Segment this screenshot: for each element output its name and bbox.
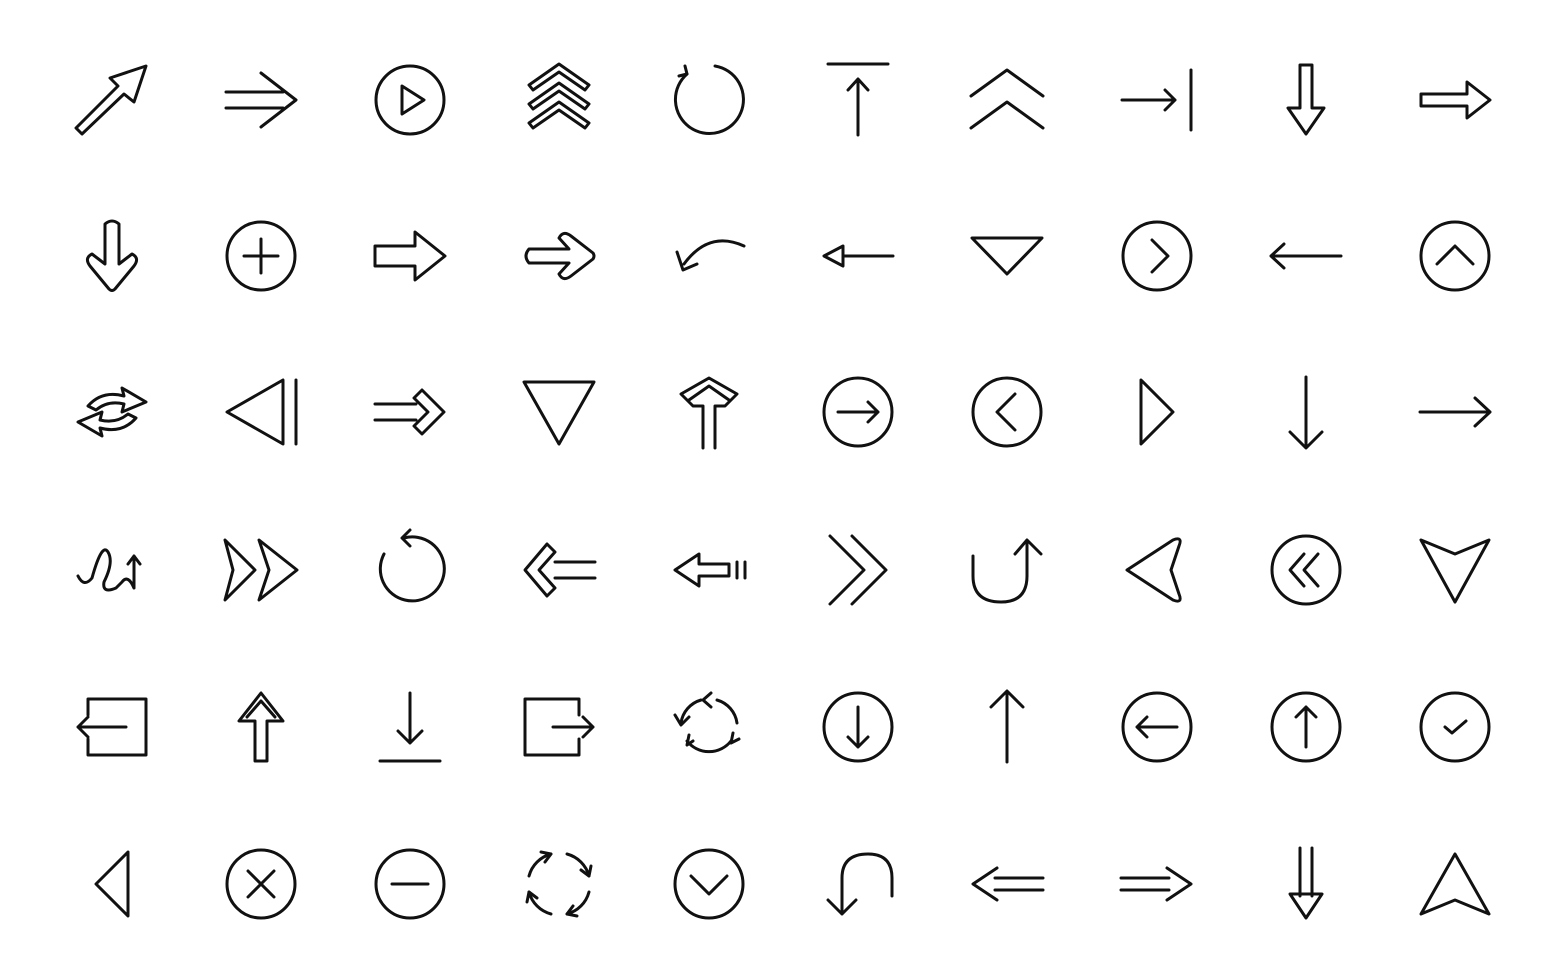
icon: left triangle with bar xyxy=(227,380,296,444)
icon: right arrow line xyxy=(1420,398,1490,426)
icon: chevron right circle xyxy=(1123,222,1191,290)
icon: box with arrow right xyxy=(525,699,593,755)
icon: left rounded triangle xyxy=(1127,539,1180,601)
icon: swap arrows xyxy=(78,388,146,436)
icon: navigation arrow down xyxy=(1421,540,1489,602)
icon: double chevron left circle xyxy=(1272,536,1340,604)
icon: play circle xyxy=(376,66,444,134)
icon: left outlined arrow with lines xyxy=(525,544,595,596)
icon: plus circle xyxy=(227,222,295,290)
icon: three-arrow cycle xyxy=(675,693,739,752)
icon: double chevron right xyxy=(830,536,886,604)
icon: up arrow two shafts xyxy=(681,378,737,448)
icon: double-line arrow right xyxy=(226,73,296,127)
icon: box exit left xyxy=(78,699,146,755)
icon: right arrow lines with outlined head xyxy=(375,390,444,434)
icon: up block arrow xyxy=(239,693,283,761)
icon: arrow up to bar xyxy=(828,64,888,135)
icon: right triangle narrow xyxy=(1141,380,1173,444)
icon: right rounded arrow xyxy=(526,233,594,279)
icon: four arcs cycle xyxy=(527,852,591,916)
icon: down double-line arrow xyxy=(1290,848,1322,918)
icon: right arrow circle xyxy=(824,378,892,446)
icon: curved arrow left xyxy=(677,241,744,270)
icon: chevron left circle xyxy=(973,378,1041,446)
icon: down block arrow xyxy=(1288,65,1324,134)
icon: download xyxy=(380,693,440,761)
icon: right block arrow xyxy=(375,232,445,280)
icon: check circle xyxy=(1421,693,1489,761)
icon: down triangle big xyxy=(524,382,594,444)
icon: chevron down circle xyxy=(675,850,743,918)
icon: left arrow triangle head xyxy=(824,246,893,266)
icon: left arrow line xyxy=(1271,244,1341,268)
icon: triple chevron up xyxy=(529,64,589,128)
icon: close circle xyxy=(227,850,295,918)
icon: double chevron up xyxy=(971,70,1043,128)
icon: navigation arrow up xyxy=(1421,854,1489,914)
icon: up arrow line xyxy=(991,691,1023,762)
icon: wavy arrow up xyxy=(78,550,140,590)
icon: left block arrow with dashes xyxy=(675,554,745,586)
icon: right double-line arrow xyxy=(1121,868,1191,900)
icon: U-turn arrow up xyxy=(973,540,1041,602)
icon: left triangle narrow xyxy=(96,852,128,916)
icon: down arrow line xyxy=(1290,377,1322,448)
icon: minus circle xyxy=(376,850,444,918)
icon: down rounded arrow xyxy=(87,221,137,290)
icon: chevron up circle xyxy=(1421,222,1489,290)
icon: diagonal block arrow up-right xyxy=(76,66,146,134)
icon: double triangle right xyxy=(225,540,297,600)
icon: U-turn arrow back down xyxy=(828,854,892,914)
icon: right block arrow xyxy=(1421,82,1490,118)
icon: down arrow circle xyxy=(824,693,892,761)
icon: refresh circle open xyxy=(380,530,444,601)
icon: up arrow circle xyxy=(1272,693,1340,761)
icon: left double-line arrow xyxy=(973,868,1043,900)
icon: arrow right to bar xyxy=(1122,70,1191,130)
icon: refresh circle xyxy=(675,66,743,134)
icon: down triangle wide xyxy=(972,238,1042,274)
icon: left arrow circle xyxy=(1123,693,1191,761)
